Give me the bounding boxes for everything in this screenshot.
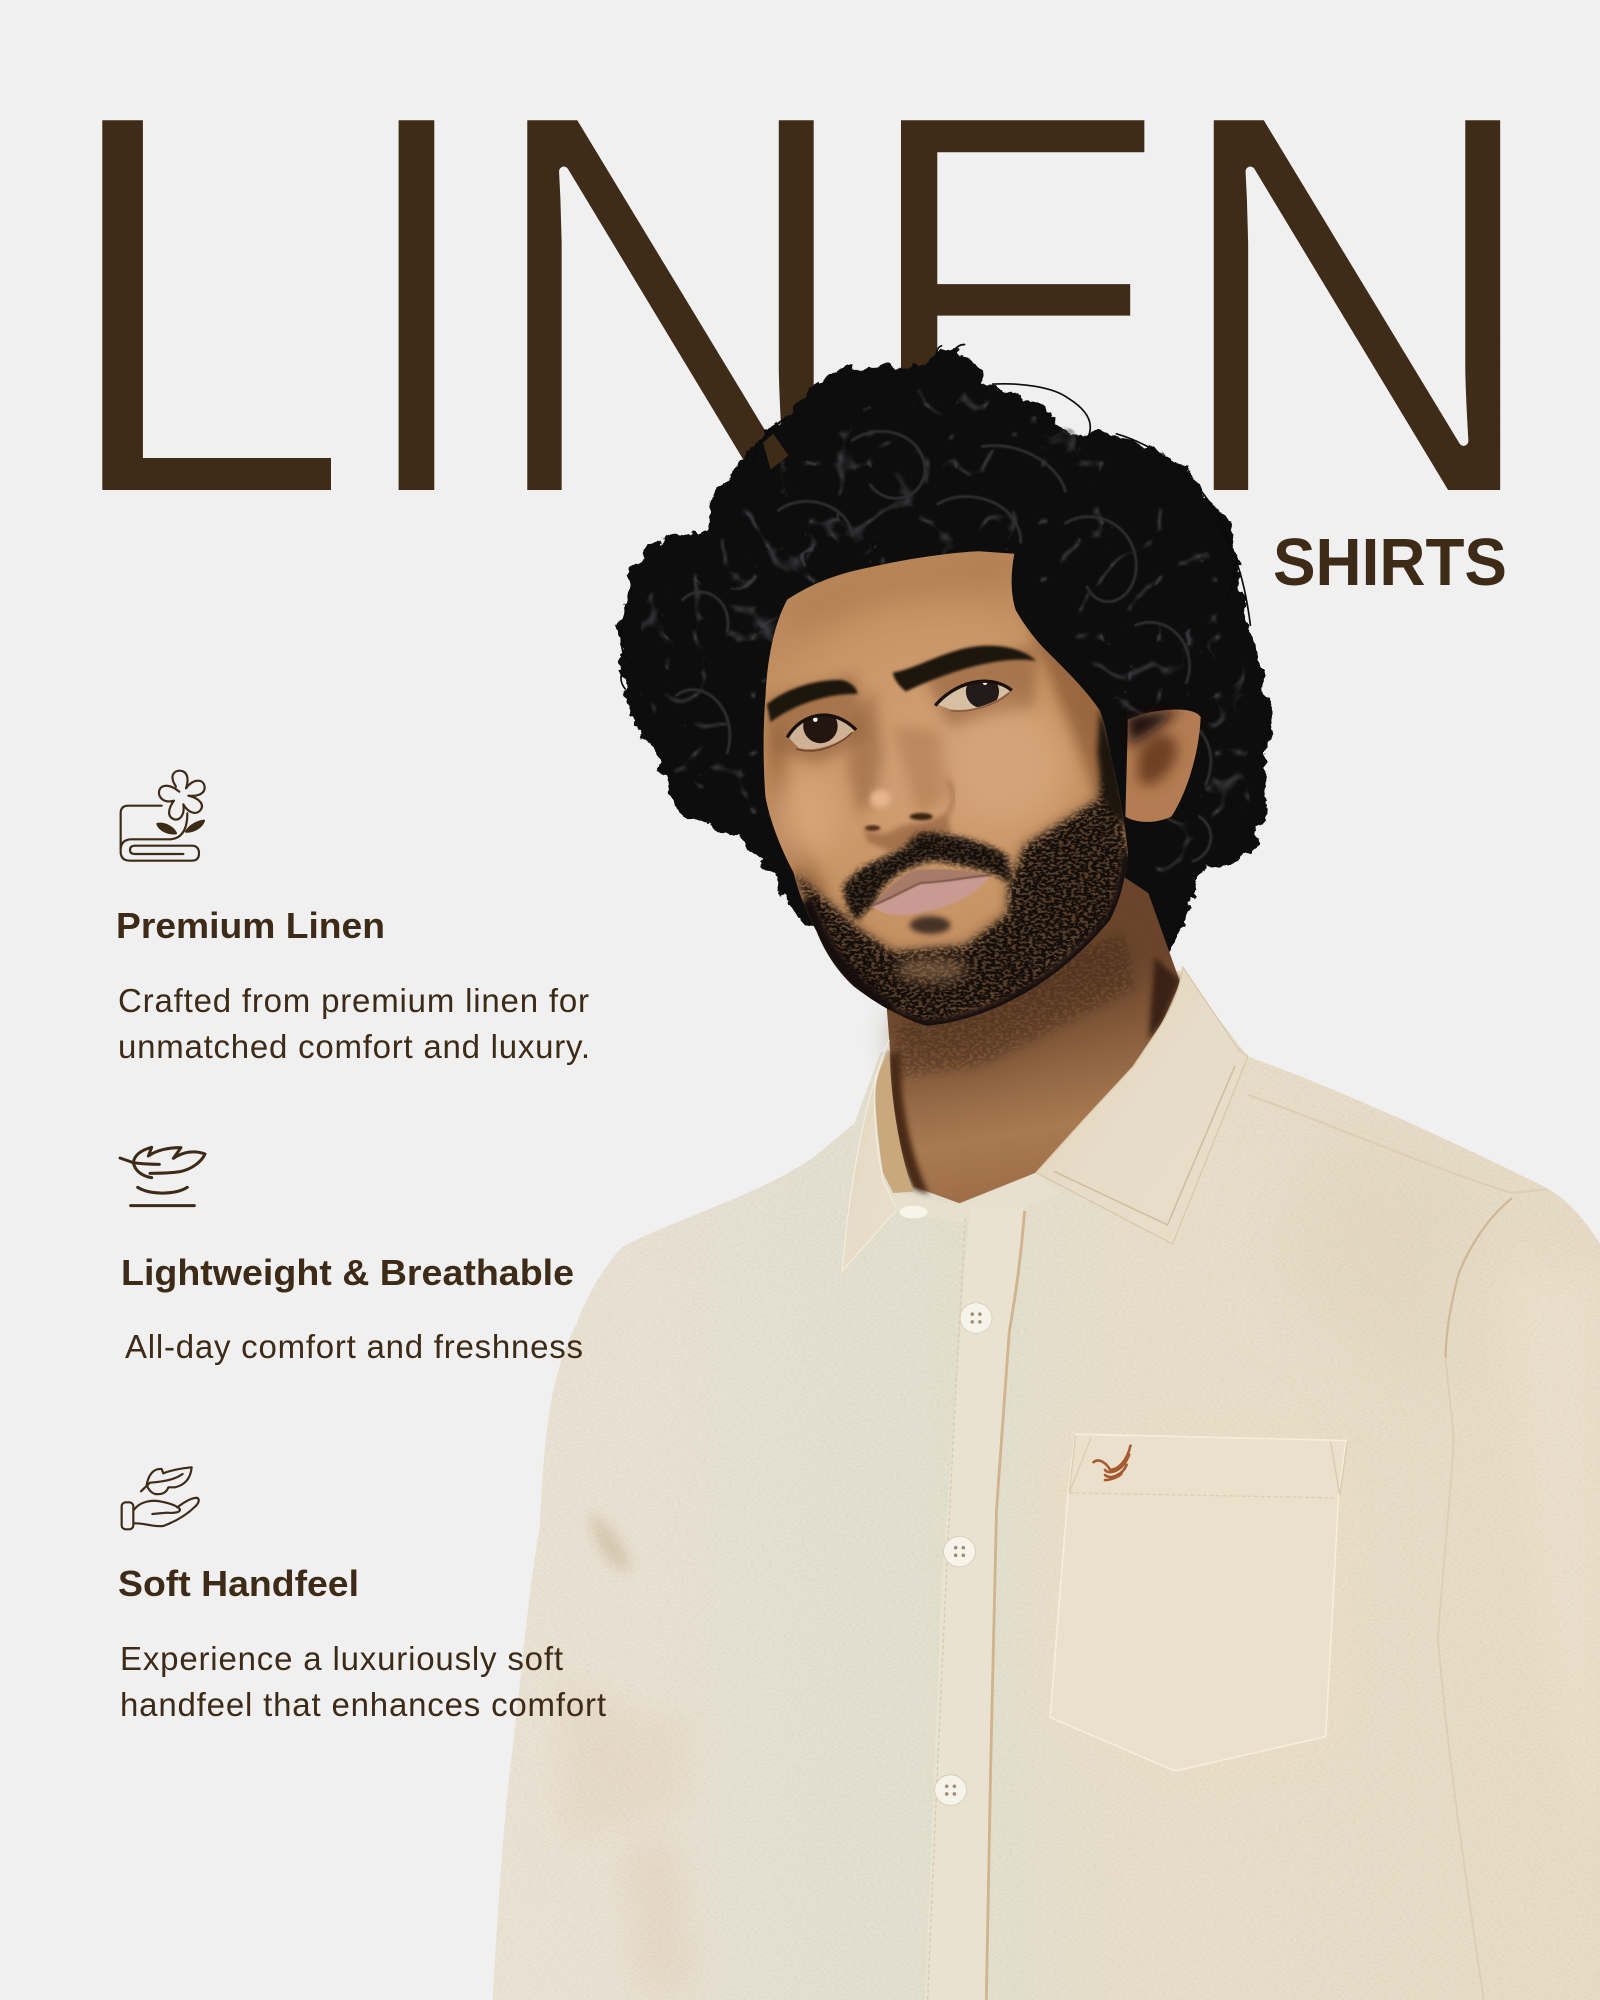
subtitle: SHIRTS: SHIRTS bbox=[1273, 525, 1507, 600]
pocket bbox=[1050, 1434, 1347, 1771]
title: LINEN: E bbox=[857, 0, 1179, 612]
mustache bbox=[843, 833, 1012, 920]
soul patch bbox=[910, 916, 951, 934]
right collar bbox=[1036, 967, 1248, 1244]
right eye bbox=[935, 675, 1012, 711]
loose strands bbox=[621, 344, 1250, 689]
hair sheen arcs bbox=[676, 431, 1211, 861]
hair curl texture bbox=[638, 383, 1250, 880]
body text: Crafted from premium linen for bbox=[118, 982, 589, 1019]
icon: hand and leaf bbox=[122, 1467, 199, 1529]
eyebrows bbox=[767, 646, 1036, 722]
title: LINEN bbox=[53, 0, 1548, 613]
collar button bbox=[900, 1206, 928, 1219]
title: LINEN: I bbox=[350, 0, 482, 613]
ear bbox=[1125, 709, 1201, 822]
placket bbox=[925, 1206, 1025, 2000]
heading: Soft Handfeel bbox=[118, 1563, 359, 1604]
icon: feather bbox=[120, 1147, 205, 1206]
body text: All-day comfort and freshness bbox=[125, 1328, 583, 1365]
nose bbox=[863, 781, 953, 852]
letter N showing through hair bbox=[763, 434, 789, 470]
title: LINEN: N bbox=[479, 0, 862, 612]
face bbox=[764, 549, 1136, 1026]
left eye bbox=[787, 709, 856, 751]
shirt body bbox=[485, 957, 1600, 2000]
title: LINEN: L bbox=[53, 0, 354, 612]
heading: Lightweight & Breathable bbox=[121, 1252, 574, 1293]
chin light bbox=[896, 957, 967, 982]
body text: unmatched comfort and luxury. bbox=[118, 1028, 590, 1065]
feature: Premium Linen bbox=[116, 771, 590, 1065]
lips bbox=[871, 869, 990, 915]
collar stitch bbox=[1054, 1065, 1235, 1225]
hair bbox=[619, 344, 1271, 961]
logo bbox=[1093, 1446, 1130, 1480]
neck bbox=[887, 868, 1180, 1203]
sideburn bbox=[1097, 708, 1128, 829]
body text: handfeel that enhances comfort bbox=[120, 1686, 606, 1723]
beard stubble bbox=[794, 753, 1128, 1026]
left collar lining bbox=[875, 1050, 914, 1193]
jawline shade bbox=[868, 854, 1128, 1026]
collar band bbox=[893, 1173, 1059, 1222]
face shading bbox=[766, 549, 1136, 1026]
icon: towel and flower bbox=[121, 771, 205, 861]
buttons bbox=[935, 1303, 992, 1805]
feature: Lightweight & Breathable bbox=[120, 1147, 583, 1365]
model photo illustration bbox=[485, 344, 1600, 2000]
beard base bbox=[794, 753, 1128, 1026]
body text bbox=[120, 1640, 606, 1723]
left collar bbox=[842, 1040, 897, 1271]
feature: Soft Handfeel bbox=[118, 1467, 606, 1723]
heading: Premium Linen bbox=[116, 905, 385, 946]
right shoulder seam bbox=[1446, 1198, 1512, 1358]
body text: Experience a luxuriously soft bbox=[120, 1640, 563, 1677]
title: LINEN: N bbox=[1166, 0, 1548, 612]
body text bbox=[118, 982, 590, 1065]
